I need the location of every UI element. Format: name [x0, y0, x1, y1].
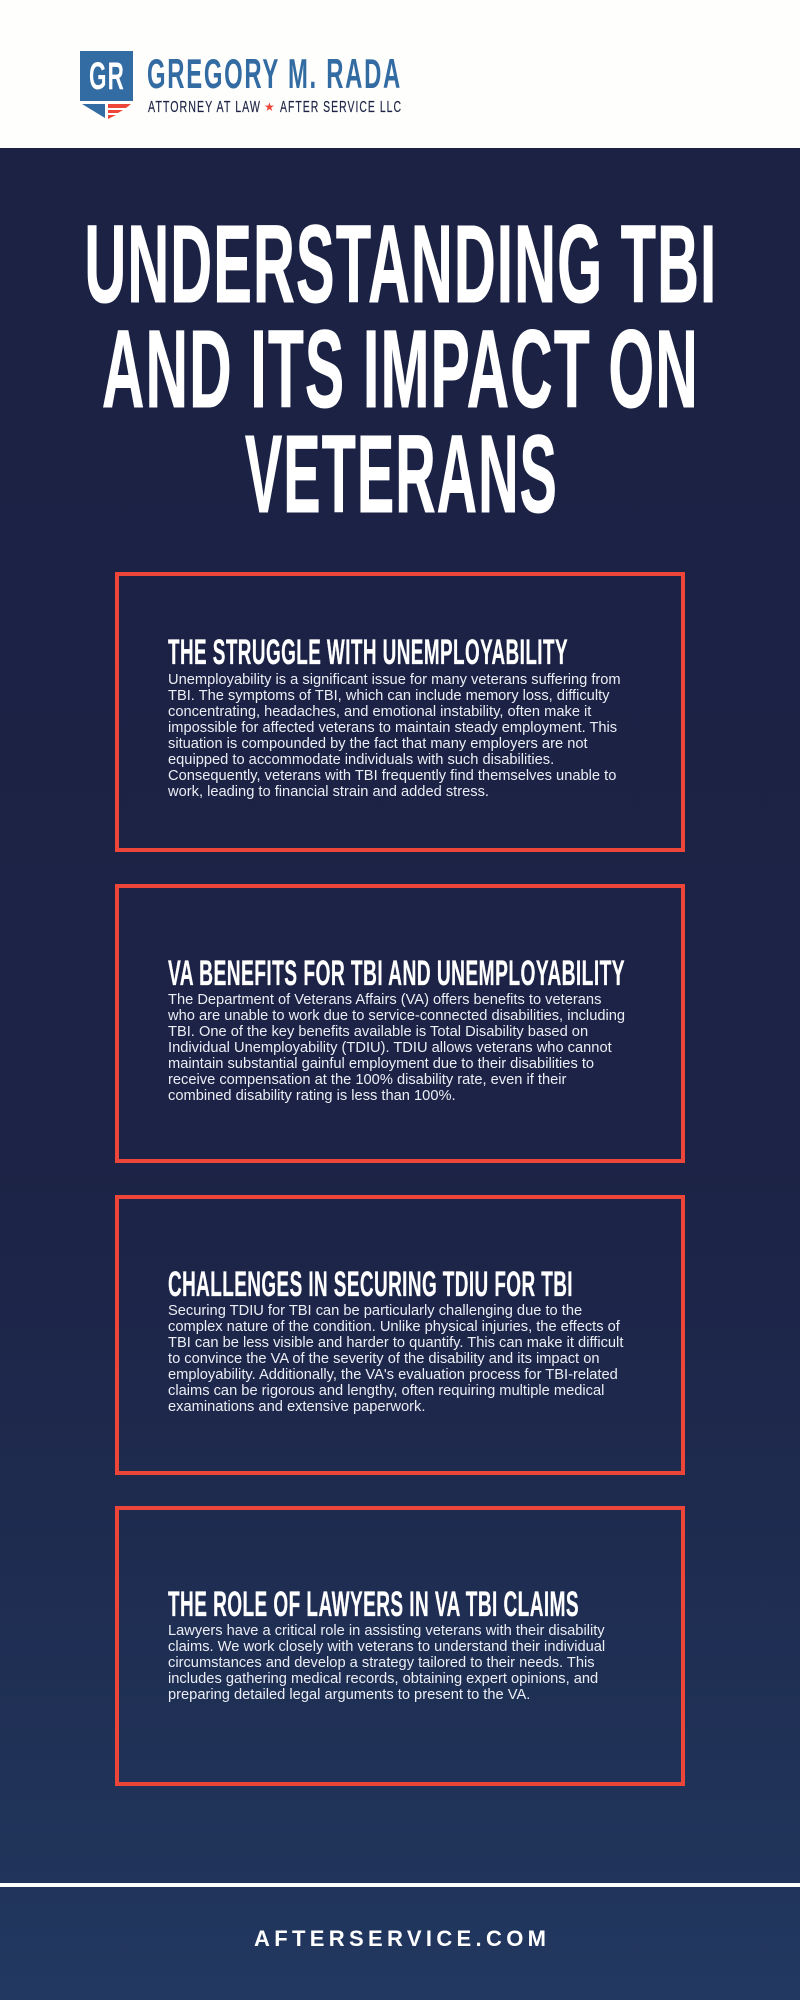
body text: receive compensation at the 100% disability rate, even if their: [168, 1072, 567, 1088]
logo tagline: ★: [264, 100, 275, 114]
logo tagline: ATTORNEY AT LAW: [148, 99, 261, 116]
body text: includes gathering medical records, obtaining expert opinions, and: [168, 1671, 598, 1687]
panel: challenges in securing TDIU: [117, 1197, 683, 1473]
footer divider: [0, 1883, 800, 1887]
body text: [167, 672, 621, 800]
body text: circumstances and develop a strategy tailored to their needs. This: [168, 1655, 595, 1671]
body text: [168, 1623, 605, 1703]
body text: Individual Unemployability (TDIU). TDIU allows veterans who cannot: [168, 1040, 612, 1056]
body text: to convince the VA of the severity of the disability and its impact on: [168, 1351, 600, 1367]
header band with logo: [0, 0, 800, 148]
body text: examinations and extensive paperwork.: [168, 1399, 425, 1415]
body text: employability. Additionally, the VA's evaluation process for TBI-related: [168, 1367, 618, 1383]
panel: the role of lawyers: [117, 1508, 683, 1784]
body text: [167, 992, 625, 1104]
title: [84, 203, 718, 536]
panel: VA benefits: [117, 886, 683, 1161]
body text: complex nature of the condition. Unlike physical injuries, the effects of: [168, 1319, 621, 1335]
logo tagline: AFTER SERVICE LLC: [280, 99, 402, 116]
logo tagline: [148, 99, 402, 116]
body text: situation is compounded by the fact that many employers are not: [168, 736, 588, 752]
body text: TBI can be less visible and harder to quantify. This can make it difficult: [168, 1335, 623, 1351]
body text: TBI. One of the key benefits available is Total Disability based on: [168, 1024, 588, 1040]
body text: preparing detailed legal arguments to present to the VA.: [168, 1687, 530, 1703]
body text: Securing TDIU for TBI can be particularly challenging due to the: [168, 1303, 582, 1319]
body text: Consequently, veterans with TBI frequently find themselves unable to: [168, 768, 616, 784]
body text: TBI. The symptoms of TBI, which can include memory loss, difficulty: [168, 688, 610, 704]
body text: who are unable to work due to service-connected disabilities, including: [167, 1008, 625, 1024]
body text: equipped to accommodate individuals with such disabilities.: [168, 752, 554, 768]
logo name: GREGORY M. RADA: [147, 50, 402, 97]
body text: [168, 1303, 623, 1415]
panel: the struggle with unemployability: [117, 574, 683, 850]
icon: GR shield logo: GR: [89, 55, 125, 98]
body text: concentrating, headaches, and emotional instability, often make it: [168, 704, 591, 720]
footer website text: AFTERSERVICE.COM: [254, 1926, 546, 1951]
body text: combined disability rating is less than 100%.: [168, 1088, 456, 1104]
icon: GR shield logo: [80, 51, 133, 119]
body text: Lawyers have a critical role in assisting veterans with their disability: [168, 1623, 605, 1639]
body text: Unemployability is a significant issue for many veterans suffering from: [168, 672, 621, 688]
body text: impossible for affected veterans to maintain steady employment. This: [168, 720, 617, 736]
body text: maintain substantial gainful employment due to their disabilities to: [168, 1056, 594, 1072]
body text: claims. We work closely with veterans to understand their individual: [168, 1639, 605, 1655]
body text: claims can be rigorous and lengthy, often requiring multiple medical: [168, 1383, 604, 1399]
body text: work, leading to financial strain and added stress.: [167, 784, 489, 800]
body text: The Department of Veterans Affairs (VA) offers benefits to veterans: [168, 992, 601, 1008]
